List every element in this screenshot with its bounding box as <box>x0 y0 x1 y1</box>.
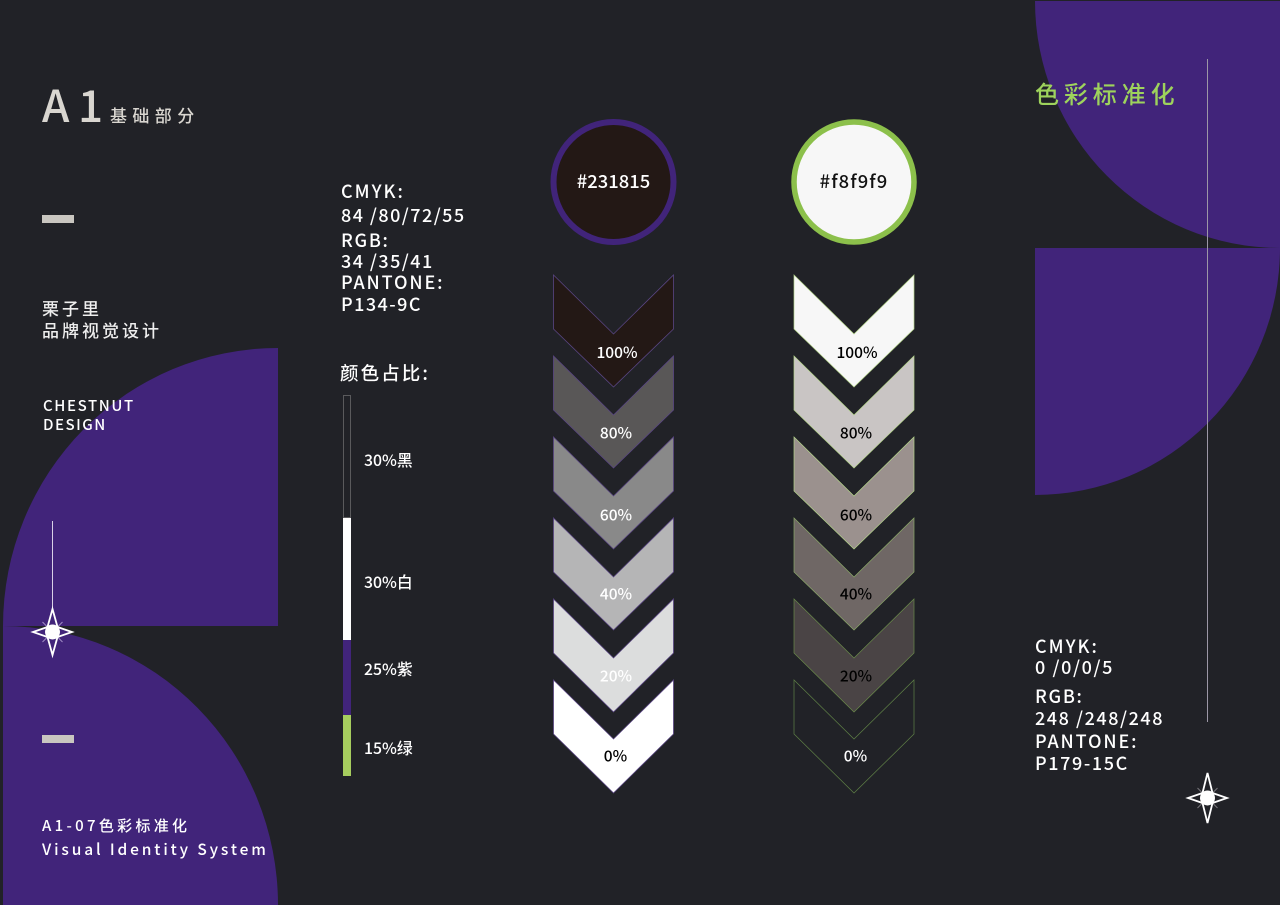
circle swatch: dark: #231815 <box>577 168 650 194</box>
text block: brand name <box>42 295 162 342</box>
chevron dark 80: 80% <box>600 422 632 444</box>
panel: right quarter circle upper <box>1035 1 1280 248</box>
chart labels: 30%黑 <box>364 448 413 471</box>
text block: light colour specs <box>1035 633 1164 776</box>
title: A1 section <box>42 71 200 135</box>
text block: dark colour specs <box>341 178 466 317</box>
chevrons: light tints <box>794 275 914 793</box>
panel: left quarter circle upper <box>3 348 278 626</box>
vertical line left <box>52 521 53 616</box>
panel: right quarter circle lower <box>1035 248 1280 495</box>
chart: colour ratio bar <box>343 396 351 776</box>
chart labels <box>364 448 413 759</box>
chevrons: dark tints <box>554 275 674 793</box>
text block: light colour specs: 0 /0/0/5 <box>1035 654 1114 680</box>
panel: left quarter circle lower <box>3 626 278 905</box>
chevron dark 80 <box>554 356 674 468</box>
chevron light 0 <box>794 680 914 793</box>
text block: dark colour specs: 84 /80/72/55 <box>341 202 466 228</box>
chevron light 60 <box>794 437 914 549</box>
chevron light 80 <box>794 356 914 468</box>
chevron dark 0: 0% <box>604 744 627 766</box>
chevron light 100: 100% <box>836 341 878 363</box>
chevron light 60: 60% <box>840 504 872 526</box>
chevron light 80: 80% <box>840 422 872 444</box>
chevron dark 60: 60% <box>600 504 632 526</box>
divider bar upper <box>42 215 74 223</box>
chevron light 0: 0% <box>844 744 867 766</box>
chevron light 20: 20% <box>840 664 872 686</box>
text block: light colour specs: CMYK: <box>1035 633 1099 659</box>
text block: footer <box>41 815 269 860</box>
divider bar lower <box>42 735 74 743</box>
circle swatch: light: #f8f9f9 <box>820 168 888 194</box>
chevron dark 0 <box>554 680 674 793</box>
chevron dark 20 <box>554 599 674 712</box>
chevron dark 40: 40% <box>600 582 632 604</box>
chevron light 100 <box>794 275 914 387</box>
circle swatch: light <box>794 122 914 242</box>
text block: chestnut design: DESIGN <box>43 414 107 435</box>
text block: footer: Visual Identity System <box>41 838 269 860</box>
chart labels: 25%紫 <box>364 657 413 680</box>
text block: chestnut design <box>43 395 135 435</box>
chevron light 20 <box>794 599 914 712</box>
chevron light 40 <box>794 518 914 630</box>
chevron dark 40 <box>554 518 674 630</box>
heading: colour standardization: 色彩标准化 <box>1035 75 1180 110</box>
chart labels: 15%绿 <box>364 736 413 759</box>
text block: light colour specs: RGB: <box>1035 683 1084 709</box>
text block: light colour specs: PANTONE: <box>1035 728 1138 754</box>
chevron dark 20: 20% <box>600 664 632 686</box>
title: A1 section: A <box>42 71 70 135</box>
text block: dark colour specs: PANTONE: <box>341 269 444 295</box>
text block: dark colour specs: RGB: <box>341 227 390 253</box>
text block: chestnut design: CHESTNUT <box>43 395 135 416</box>
vertical line right <box>1207 59 1208 722</box>
text block: light colour specs: P179-15C <box>1035 750 1129 776</box>
icon: star right <box>1188 773 1227 823</box>
chevron dark 60 <box>554 437 674 549</box>
chevron light 40: 40% <box>840 582 872 604</box>
text block: dark colour specs: CMYK: <box>341 178 405 204</box>
text block: brand name: 栗子里 <box>42 295 102 320</box>
text block: dark colour specs: P134-9C <box>341 291 422 317</box>
text block: light colour specs: 248 /248/248 <box>1035 705 1164 731</box>
title: A1 section: 基础部分 <box>110 102 200 127</box>
title: A1 section: 1 <box>78 71 103 135</box>
text block: footer: A1-07色彩标准化 <box>42 815 190 836</box>
text block: dark colour specs: 34 /35/41 <box>341 248 434 274</box>
heading: colour ratio: 颜色占比: <box>340 360 430 386</box>
icon: star left <box>33 609 72 655</box>
circle swatch: dark <box>554 122 674 242</box>
text block: brand name: 品牌视觉设计 <box>42 317 162 342</box>
chart labels: 30%白 <box>364 570 413 593</box>
chevron dark 100 <box>554 275 674 387</box>
chevron dark 100: 100% <box>596 341 638 363</box>
